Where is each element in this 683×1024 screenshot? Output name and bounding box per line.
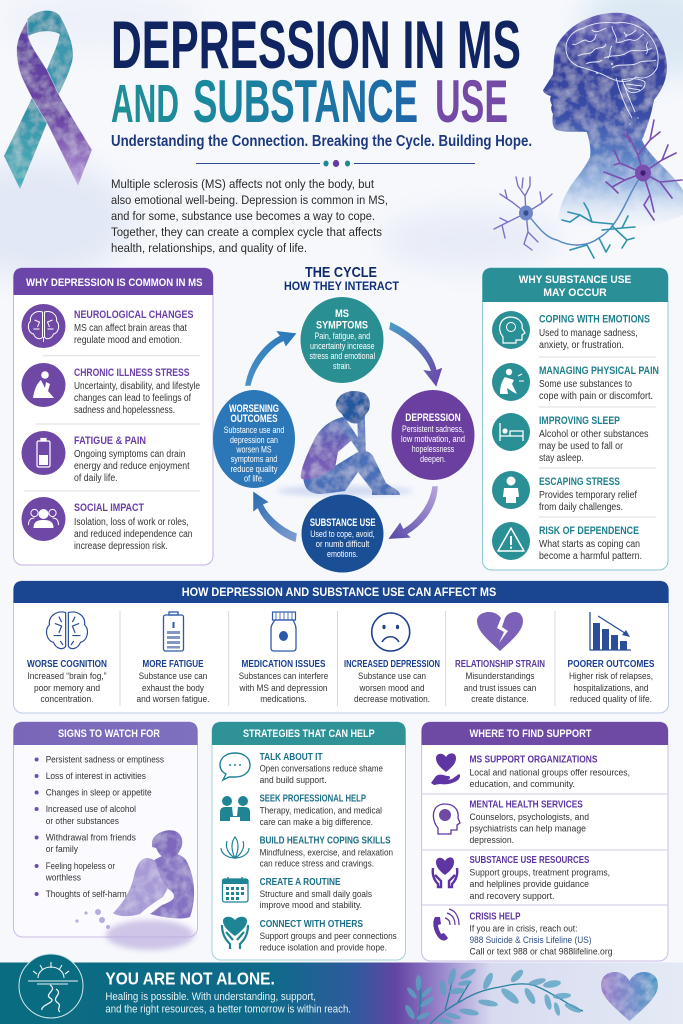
strategy: build healthy coping skills: Mindfulness, exercise, and relaxation bbox=[260, 848, 393, 859]
node: MS symptoms bbox=[300, 297, 384, 383]
item: improving sleep bbox=[492, 413, 648, 464]
panel header bbox=[14, 722, 198, 745]
column: poorer outcomes: POORER OUTCOMES bbox=[568, 659, 655, 670]
node: depression: low motivation, and bbox=[401, 434, 465, 444]
list of warning signs: Loss of interest in activities bbox=[46, 771, 146, 782]
item: risk of dependence bbox=[492, 522, 642, 562]
item: fatigue and pain bbox=[22, 431, 190, 484]
footer message: Healing is possible. With understanding, support, bbox=[105, 991, 316, 1003]
item: social impact bbox=[22, 497, 192, 552]
item: fatigue and pain: of daily life. bbox=[74, 473, 118, 484]
strategy: seek professional help: care can make a big difference. bbox=[260, 817, 373, 828]
footer banner bbox=[0, 954, 683, 1024]
item: fatigue and pain: Ongoing symptoms can drain bbox=[74, 449, 186, 460]
item: escaping stress bbox=[492, 471, 637, 513]
list of warning signs bbox=[35, 755, 164, 900]
item: coping with emotions: Used to manage sadness, bbox=[539, 328, 638, 339]
item: escaping stress: from daily challenges. bbox=[539, 502, 623, 513]
figure: seated person bbox=[277, 391, 413, 496]
item: coping with emotions: anxiety, or frustration. bbox=[539, 340, 624, 351]
cycle diagram bbox=[213, 297, 474, 572]
support: mental health services: psychiatrists can help manage bbox=[470, 824, 586, 835]
column: worse cognition: Increased “brain fog,” bbox=[28, 671, 106, 682]
panel header: HOW DEPRESSION AND SUBSTANCE USE CAN AFFECT MS bbox=[182, 585, 496, 599]
column: increased depression: INCREASED DEPRESSION bbox=[344, 659, 440, 670]
strategy: connect with others: reduce isolation and provide hope. bbox=[260, 943, 387, 954]
strategy: create a routine: CREATE A ROUTINE bbox=[260, 877, 341, 888]
column: medication issues: Substances can interfere bbox=[239, 671, 328, 682]
column: poorer outcomes bbox=[568, 612, 655, 705]
strategy: connect with others: Support groups and peer connections bbox=[260, 931, 397, 942]
item: improving sleep: Alcohol or other substances bbox=[539, 429, 648, 440]
list of warning signs: or family bbox=[46, 844, 78, 855]
column: poorer outcomes: Higher risk of relapses, bbox=[569, 671, 653, 682]
column: relationship strain: RELATIONSHIP STRAIN bbox=[455, 659, 545, 670]
item: social impact: SOCIAL IMPACT bbox=[74, 502, 144, 514]
node: substance use: SUBSTANCE USE bbox=[310, 517, 376, 529]
node: worsening outcomes: Substance use and bbox=[224, 425, 284, 435]
item: fatigue and pain: FATIGUE & PAIN bbox=[74, 435, 146, 447]
list of warning signs: or other substances bbox=[46, 816, 119, 827]
item: neurological changes: MS can affect brain areas that bbox=[74, 323, 187, 334]
strategy: talk about it: TALK ABOUT IT bbox=[260, 752, 323, 763]
column: worse cognition: poor memory and bbox=[34, 683, 100, 694]
panel: where to find support bbox=[422, 722, 668, 961]
column: more fatigue: MORE FATIGUE bbox=[142, 659, 204, 670]
title bbox=[111, 7, 521, 135]
item: improving sleep: IMPROVING SLEEP bbox=[539, 415, 620, 427]
column: worse cognition bbox=[27, 612, 107, 705]
strategy: seek professional help bbox=[220, 794, 382, 828]
icon: leafy branches bbox=[403, 967, 583, 1024]
arrow: symptoms to depression bbox=[390, 323, 441, 385]
node: worsening outcomes: reduce quality bbox=[230, 464, 278, 474]
footer message bbox=[105, 968, 351, 1016]
column: more fatigue: and worsen fatigue. bbox=[136, 694, 210, 705]
item: chronic illness stress: Uncertainty, disability, and lifestyle bbox=[74, 381, 200, 392]
figure: seated person in purple watercolor bbox=[75, 830, 194, 950]
icon: watercolor heart bbox=[601, 972, 658, 1021]
heading: the cycle: THE CYCLE bbox=[305, 264, 377, 281]
strategy: seek professional help: SEEK PROFESSIONAL HELP bbox=[260, 794, 366, 805]
item: neurological changes: NEUROLOGICAL CHANGES bbox=[74, 309, 193, 321]
arrow: depression to substance use bbox=[390, 487, 437, 538]
list of warning signs: Thoughts of self-harm bbox=[46, 889, 127, 900]
panel header bbox=[212, 722, 406, 745]
column: poorer outcomes: reduced quality of life. bbox=[570, 694, 652, 705]
panel: why depression is common in MS bbox=[14, 268, 213, 565]
panel header: WHY SUBSTANCE USE bbox=[519, 274, 631, 286]
strategy: talk about it bbox=[220, 752, 383, 786]
column: increased depression: Substance use can bbox=[358, 671, 426, 682]
column: worse cognition: WORSE COGNITION bbox=[27, 659, 107, 670]
title: USE bbox=[435, 68, 508, 135]
column: more fatigue: exhaust the body bbox=[142, 683, 204, 694]
item: risk of dependence: become a harmful pattern. bbox=[539, 551, 642, 562]
support: MS support organizations: MS SUPPORT ORGANIZATIONS bbox=[470, 754, 598, 765]
item: social impact: increase depression risk. bbox=[74, 541, 168, 552]
panel: strategies that can help bbox=[212, 722, 406, 960]
item: improving sleep: stay asleep. bbox=[539, 453, 584, 464]
strategy: connect with others bbox=[222, 917, 397, 954]
panel header bbox=[14, 268, 213, 295]
column: medication issues: MEDICATION ISSUES bbox=[242, 659, 326, 670]
strategy: build healthy coping skills bbox=[221, 835, 393, 870]
support: substance use resources: Support groups, treatment programs, bbox=[470, 868, 610, 879]
support: crisis help: Call or text 988 or chat 988lifeline.org bbox=[470, 946, 612, 957]
divider with dots bbox=[196, 160, 475, 167]
node: worsening outcomes: worsen MS bbox=[236, 444, 272, 454]
footer message: and the right resources, a better tomorrow is within reach. bbox=[105, 1004, 351, 1016]
strategy: create a routine bbox=[222, 877, 372, 911]
list of warning signs: Increased use of alcohol bbox=[46, 804, 136, 815]
intro text: Together, they can create a complex cycle that affects bbox=[111, 225, 382, 239]
list of warning signs: Changes in sleep or appetite bbox=[46, 788, 152, 799]
node: worsening outcomes: WORSENING bbox=[229, 403, 279, 415]
item: social impact: and reduced independence can bbox=[74, 529, 192, 540]
column: medication issues: with MS and depression bbox=[239, 683, 328, 694]
intro text bbox=[111, 177, 388, 255]
item: chronic illness stress: changes can lead to feelings of bbox=[74, 393, 191, 404]
support: crisis help bbox=[433, 909, 612, 957]
heading: the cycle: HOW THEY INTERACT bbox=[284, 279, 400, 293]
column: relationship strain: create distance. bbox=[471, 694, 529, 705]
column: relationship strain: Misunderstandings bbox=[466, 671, 535, 682]
node: depression: DEPRESSION bbox=[405, 412, 461, 424]
icon: awareness ribbon bbox=[4, 11, 92, 189]
node: depression: Persistent sadness, bbox=[402, 424, 464, 434]
support: crisis help: If you are in crisis, reach out: bbox=[470, 924, 578, 935]
strategy: build healthy coping skills: BUILD HEALTHY COPING SKILLS bbox=[260, 835, 391, 846]
arrow: substance use to worsening outcomes bbox=[254, 493, 296, 541]
support: crisis help: CRISIS HELP bbox=[470, 911, 521, 922]
strategy: create a routine: Structure and small daily goals bbox=[260, 889, 372, 900]
item: managing physical pain: cope with pain or discomfort. bbox=[539, 391, 653, 402]
item: chronic illness stress: sadness and hopelessness. bbox=[74, 405, 175, 416]
node: worsening outcomes: of life. bbox=[244, 474, 264, 484]
item: risk of dependence: RISK OF DEPENDENCE bbox=[539, 525, 639, 537]
node: MS symptoms: SYMPTOMS bbox=[316, 320, 368, 332]
panel: how depression and substance use can affect MS bbox=[14, 581, 668, 713]
node: MS symptoms: uncertainty increase bbox=[310, 341, 375, 351]
column: more fatigue: Substance use can bbox=[139, 671, 207, 682]
support: substance use resources: and recovery support. bbox=[470, 891, 554, 902]
column: increased depression bbox=[344, 613, 440, 705]
list of warning signs: Feeling hopeless or bbox=[46, 861, 116, 872]
title: SUBSTANCE bbox=[193, 68, 418, 135]
item: neurological changes: regulate mood and emotion. bbox=[74, 335, 182, 346]
intro text: health, relationships, and quality of life. bbox=[111, 241, 307, 255]
node: substance use: or numb difficult bbox=[316, 539, 370, 549]
list of warning signs: Withdrawal from friends bbox=[46, 833, 136, 844]
item: managing physical pain: Some use substances to bbox=[539, 379, 632, 390]
panel header: WHERE TO FIND SUPPORT bbox=[470, 728, 592, 740]
list of warning signs: Persistent sadness or emptiness bbox=[46, 755, 164, 766]
panel header bbox=[482, 268, 668, 302]
node: worsening outcomes: symptoms and bbox=[231, 454, 277, 464]
node: depression: deepen. bbox=[420, 454, 446, 464]
heading: the cycle bbox=[284, 264, 400, 293]
intro text: also emotional well-being. Depression is common in MS, bbox=[111, 193, 388, 207]
column: increased depression: worsen mood and bbox=[359, 683, 424, 694]
footer logo: sunrise and path bbox=[19, 954, 83, 1018]
column: poorer outcomes: hospitalizations, and bbox=[574, 683, 648, 694]
column: medication issues bbox=[239, 612, 328, 705]
node: substance use bbox=[302, 494, 384, 572]
column: relationship strain: and trust issues can bbox=[464, 683, 536, 694]
item: improving sleep: may be used to fall or bbox=[539, 441, 624, 452]
panel header: STRATEGIES THAT CAN HELP bbox=[243, 728, 375, 740]
support: mental health services: MENTAL HEALTH SERVICES bbox=[470, 800, 583, 811]
panel header: SIGNS TO WATCH FOR bbox=[58, 728, 160, 740]
item: fatigue and pain: energy and reduce enjoyment bbox=[74, 461, 190, 472]
support: substance use resources bbox=[433, 855, 610, 902]
strategy: build healthy coping skills: can reduce stress and cravings. bbox=[260, 859, 374, 870]
support: MS support organizations: Local and national groups offer resources, bbox=[470, 767, 630, 778]
head silhouette with brain bbox=[543, 13, 683, 228]
node: worsening outcomes: depression can bbox=[230, 435, 278, 445]
support: substance use resources: SUBSTANCE USE RESOURCES bbox=[470, 855, 589, 866]
panel header bbox=[14, 581, 668, 603]
column: more fatigue bbox=[136, 612, 210, 705]
panel: signs to watch for bbox=[14, 722, 198, 950]
strategy: talk about it: Open conversations reduce shame bbox=[260, 764, 383, 775]
strategy: seek professional help: Therapy, medication, and medical bbox=[260, 806, 382, 817]
node: MS symptoms: stress and emotional bbox=[310, 351, 375, 361]
support: MS support organizations: education, and community. bbox=[470, 779, 575, 790]
support: mental health services: Counselors, psychologists, and bbox=[470, 812, 589, 823]
panel header: WHY DEPRESSION IS COMMON IN MS bbox=[26, 277, 202, 289]
strategy: connect with others: CONNECT WITH OTHERS bbox=[260, 919, 363, 930]
strategy: talk about it: and build support. bbox=[260, 775, 327, 786]
strategy: create a routine: improve mood and stability. bbox=[260, 900, 362, 911]
support: crisis help: 988 Suicide & Crisis Lifeline (US) bbox=[470, 935, 592, 946]
list of warning signs: worthless bbox=[45, 873, 81, 884]
node: substance use: Used to cope, avoid, bbox=[310, 529, 375, 539]
column: relationship strain bbox=[455, 612, 545, 705]
node: MS symptoms: strain. bbox=[333, 361, 352, 371]
intro text: Multiple sclerosis (MS) affects not only the body, but bbox=[111, 177, 375, 191]
item: neurological changes bbox=[22, 304, 193, 348]
node: substance use: emotions. bbox=[327, 549, 358, 559]
column: increased depression: decrease motivation. bbox=[354, 694, 430, 705]
item: escaping stress: Provides temporary relief bbox=[539, 490, 637, 501]
icon: neurons bbox=[494, 120, 682, 258]
support: substance use resources: and helplines provide guidance bbox=[470, 879, 589, 890]
node: MS symptoms: MS bbox=[335, 308, 349, 320]
node: worsening outcomes bbox=[213, 390, 295, 488]
node: MS symptoms: Pain, fatigue, and bbox=[315, 331, 370, 341]
support: mental health services bbox=[433, 800, 589, 846]
panel: why substance use may occur bbox=[482, 268, 668, 570]
footer message: YOU ARE NOT ALONE. bbox=[105, 968, 275, 988]
node: depression: hopelessness bbox=[412, 444, 455, 454]
item: chronic illness stress: CHRONIC ILLNESS STRESS bbox=[74, 367, 190, 379]
arrow: worsening outcomes to symptoms bbox=[246, 332, 295, 385]
item: coping with emotions: COPING WITH EMOTIONS bbox=[539, 314, 650, 326]
node: depression bbox=[392, 390, 474, 480]
support: mental health services: depression. bbox=[470, 835, 514, 846]
intro text: and for some, substance use becomes a way to cope. bbox=[111, 209, 375, 223]
item: managing physical pain: MANAGING PHYSICAL PAIN bbox=[539, 365, 659, 377]
subtitle: Understanding the Connection. Breaking the Cycle. Building Hope. bbox=[111, 133, 532, 150]
node: worsening outcomes: OUTCOMES bbox=[230, 413, 278, 425]
item: coping with emotions bbox=[492, 311, 650, 351]
support: MS support organizations bbox=[431, 753, 630, 790]
column: medication issues: medications. bbox=[260, 694, 307, 705]
title: AND bbox=[111, 74, 179, 134]
item: chronic illness stress bbox=[22, 363, 200, 416]
column: worse cognition: concentration. bbox=[40, 694, 94, 705]
panel header: MAY OCCUR bbox=[543, 287, 607, 299]
item: risk of dependence: What starts as coping can bbox=[539, 539, 640, 550]
item: social impact: Isolation, loss of work or roles, bbox=[74, 517, 189, 528]
item: managing physical pain bbox=[492, 363, 659, 402]
panel header bbox=[422, 722, 668, 745]
item: escaping stress: ESCAPING STRESS bbox=[539, 476, 620, 488]
